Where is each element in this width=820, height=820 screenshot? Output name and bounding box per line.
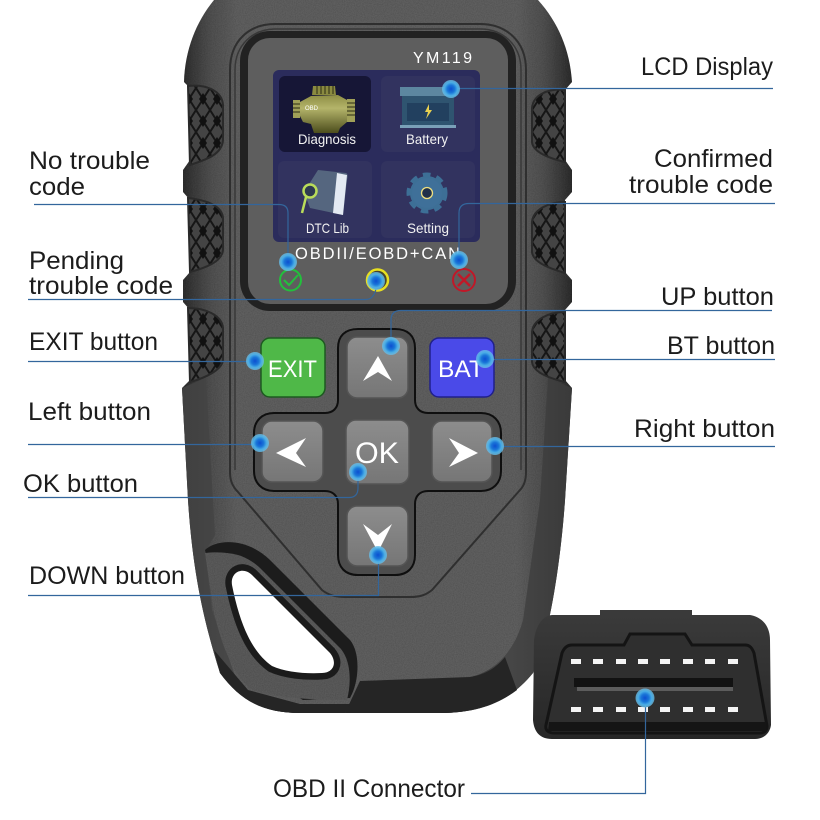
right button [432,421,492,482]
callout: OBD II Connector [273,688,654,803]
standard label: OBDII/EOBD+CAN [295,245,460,263]
tile: Diagnosis: Diagnosis [298,131,356,147]
tile: DTC Lib [278,161,372,238]
tile: Setting [381,161,475,238]
side grips right [532,90,565,382]
callout: OBD II Connector: OBD II Connector [273,775,465,803]
callout: DOWN button [28,546,387,596]
OBD II connector [533,610,771,739]
keyring loop [205,542,358,700]
connector slot [574,678,733,691]
callout: Left button [28,398,269,452]
tile: Battery [381,76,475,152]
callout: BT button: BT button [667,332,775,360]
callout: Pending trouble code [28,247,385,300]
indicator: green check [280,270,301,290]
tile: Diagnosis [279,76,371,152]
callout: Pending trouble code: Pending [29,247,124,275]
callout: Confirmed trouble code: trouble code [629,171,773,199]
LCD display [248,38,508,304]
callout: UP button [382,283,774,355]
callout: Confirmed trouble code [450,145,775,269]
indicator: yellow [367,270,388,290]
callout: Right button: Right button [634,415,775,443]
indicator: red cross [453,269,475,291]
OK button: OK [355,437,399,470]
model name: YM119 [413,50,472,67]
callout: DOWN button: DOWN button [29,562,185,590]
scanner device body [182,0,572,713]
BAT button: BAT [438,356,484,383]
engine OBD tag: OBD [305,106,319,112]
callout: Right button [486,415,775,455]
tile: DTC Lib: DTC Lib [306,220,349,236]
callout: No trouble code [29,147,297,271]
callout: EXIT button: EXIT button [29,328,158,356]
callout: OK button: OK button [23,470,138,498]
connector top tab [600,610,692,618]
callout: Confirmed trouble code: Confirmed [654,145,773,173]
callout: No trouble code: No trouble [29,147,150,175]
callout: EXIT button [28,328,264,370]
callout: OK button [23,463,367,498]
OK button [346,420,409,484]
left button [262,421,323,482]
callout: BT button [476,332,775,368]
EXIT button: EXIT [268,356,317,383]
EXIT button [261,338,325,397]
tile: Battery: Battery [406,131,448,147]
callout: UP button: UP button [661,283,774,311]
callout: Left button: Left button [28,398,151,426]
callout: LCD Display [442,53,773,98]
side grips left [188,86,223,382]
BAT button [430,338,494,397]
connector socket [546,634,767,733]
keypad [254,329,501,575]
down button [347,506,408,566]
tile: Setting: Setting [407,220,449,236]
connector pins [571,659,738,712]
callout: LCD Display: LCD Display [641,53,773,81]
up button [347,337,408,398]
callout: No trouble code: code [29,173,85,201]
face outline [230,24,526,597]
d-pad recess [254,329,501,575]
menu panel [273,70,480,242]
connector shell [533,615,771,739]
lower right and bottom band [440,378,572,713]
screen bezel [240,31,516,311]
lower left side band [182,378,300,713]
callout: Pending trouble code: trouble code [29,272,173,300]
